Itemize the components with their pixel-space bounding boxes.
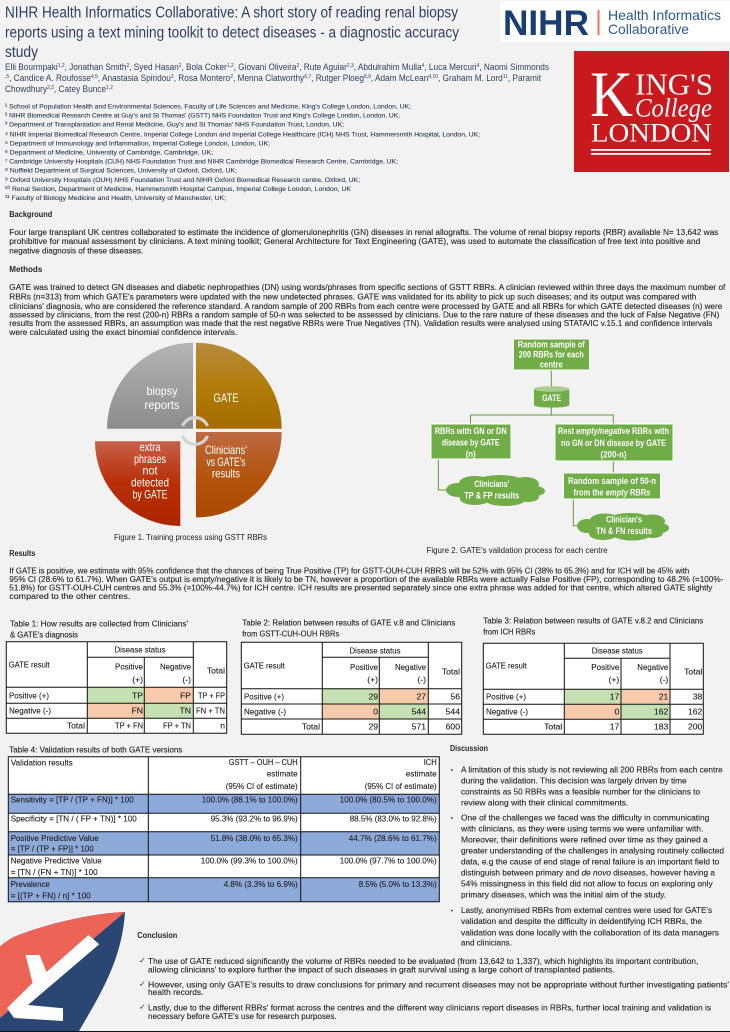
section: background xyxy=(9,209,718,256)
figure 2: validation flowchart: centre xyxy=(540,360,563,370)
authors: 4,10 xyxy=(428,74,438,80)
authors: 11 xyxy=(503,74,508,80)
authors: 2,3 xyxy=(47,85,54,91)
affiliations: ⁶ Department of Medicine, University of Cambridge, Cambridge, UK; xyxy=(5,150,213,156)
figure 1: training cycle pie: biopsy xyxy=(146,384,178,398)
figure 2: validation flowchart: Clinician's xyxy=(606,514,642,524)
table 4: validation results: GSTT – OUH – CUH xyxy=(229,757,298,767)
table 4: validation results: 4.8% (3.3% to 6.9%) xyxy=(224,879,298,889)
table 1: how results are collected: FP xyxy=(180,690,191,700)
table 3: GATE v.8.2 results: (-) xyxy=(660,674,668,684)
table 2: GATE v.8 results: 29 xyxy=(368,721,378,731)
table 3: GATE v.8.2 results: 21 xyxy=(659,691,669,701)
section: discussion: 54% missingness in this field did not allow to focus on exploring only xyxy=(461,879,713,889)
authors: , Rosa Montero xyxy=(174,73,230,83)
table 2: GATE v.8 results: 29 xyxy=(368,691,378,701)
section: methods: RBRs (n=313) from which GATE's parameters were updated with the new undetected phrases. GATE was validated for its ability to pick up such diseases; and its output was compared with xyxy=(9,292,696,302)
figure 1 caption: Figure 1. Training process using GSTT RBRs xyxy=(114,532,267,542)
authors: 8,9 xyxy=(364,74,371,80)
section: conclusion: health records. xyxy=(148,987,203,997)
section: discussion: constraints as 50 RBRs was a feasible number for the clinicians to xyxy=(461,787,700,797)
table 2: GATE v.8 results: 600 xyxy=(446,721,460,731)
affiliations: ⁵ Department of Immunology and Inflammation, Imperial College London, London, UK; xyxy=(5,140,270,148)
figure 2: validation flowchart: (200-n) xyxy=(600,450,627,460)
table 2: GATE v.8 results: Positive xyxy=(350,662,378,672)
logo: King's College London: LONDON xyxy=(591,118,712,148)
table 4: validation results: estimate xyxy=(406,769,437,779)
table 2: GATE v.8 results: Positive (+) xyxy=(244,691,284,701)
authors: 2 xyxy=(179,63,181,69)
authors: , Luca Mercuri xyxy=(424,62,477,72)
logo: NIHR Health Informatics Collaborative: NIHR xyxy=(503,4,589,43)
authors: 2 xyxy=(230,74,233,80)
section: discussion xyxy=(450,743,724,948)
table 3: GATE v.8.2 results: Positive xyxy=(591,662,620,672)
authors: , Jonathan Smith xyxy=(65,62,126,72)
figure 2: validation flowchart xyxy=(431,339,673,540)
table 2: GATE v.8 results: GATE result xyxy=(244,660,285,670)
table 3: GATE v.8.2 results: Negative xyxy=(637,662,668,672)
authors: , Syed Hasan xyxy=(129,62,179,72)
authors: , Rute Aguiar xyxy=(299,62,347,72)
section: conclusion: ✓ xyxy=(139,956,146,965)
figure 2: validation flowchart: TP & FP results xyxy=(464,490,519,500)
section: conclusion: Conclusion xyxy=(137,930,177,940)
figure 2: validation flowchart: from the empty RBRs xyxy=(574,488,651,498)
section: discussion: Moreover, their definitions were refined over time as they gained a xyxy=(461,835,708,845)
table 3: GATE v.8.2 results: 162 xyxy=(688,706,703,716)
section: discussion: One of the challenges we faced was the difficulty in communicating xyxy=(461,813,710,823)
section: results: compared to the other centres. xyxy=(9,591,130,601)
authors xyxy=(5,62,549,94)
section: discussion: validation was done locally with the collaboration of its data managers xyxy=(461,928,719,938)
figure 1: training cycle pie: by GATE xyxy=(132,488,168,502)
affiliations: ² NIHR Biomedical Research Centre at Guy's and St Thomas' (GSTT) NHS Foundation Trust and King's College London, London, UK; xyxy=(5,112,400,120)
table 2: GATE v.8 results: Negative (-) xyxy=(244,706,286,716)
logo: NIHR Health Informatics Collaborative xyxy=(500,1,730,43)
figure 2: validation flowchart: TN & FN results xyxy=(596,526,652,536)
table 1: how results are collected: TP + FP xyxy=(198,690,225,700)
table 4: validation results: = [(TP + FN) / n] * 100 xyxy=(11,890,91,900)
figure 2: validation flowchart: Random sample of 50-n xyxy=(568,476,656,486)
table 2: GATE v.8 results: 544 xyxy=(412,706,426,716)
authors: 4,5 xyxy=(91,74,98,80)
table 4: validation results: Prevalence xyxy=(11,879,50,889)
table 2: GATE v.8 results: (+) xyxy=(367,674,378,684)
table 3: GATE v.8.2 results: Disease status xyxy=(592,645,643,655)
table 4: validation results: Positive Predictive Value xyxy=(11,833,99,843)
table 2: GATE v.8 results: Table 2: Relation between results of GATE v.8 and Clinicians xyxy=(242,618,455,628)
table 3: GATE v.8.2 results: 200 xyxy=(688,721,703,731)
section: conclusion xyxy=(137,930,729,1021)
table 2: GATE v.8 results: 56 xyxy=(450,691,460,701)
table 1: how results are collected: Total xyxy=(67,720,85,730)
authors: 4 xyxy=(422,63,424,69)
table 1: how results are collected: Table 1: How results are collected from Clinicians' xyxy=(10,619,188,629)
table 1: how results are collected: FP + TN xyxy=(163,720,191,730)
table 1: how results are collected: TP xyxy=(132,690,143,700)
table 1: how results are collected: Disease status xyxy=(114,645,166,655)
icon: leaf logo xyxy=(0,912,125,1031)
section: discussion: Lastly, anonymised RBRs from external centres were used for GATE's xyxy=(461,905,712,915)
authors: , Giovani Oliveira xyxy=(234,62,296,72)
authors: , Graham M. Lord xyxy=(438,73,503,83)
title: NIHR Health Informatics Collaborative: A short story of reading renal biopsy xyxy=(5,4,458,22)
section: discussion: distinguish between primary and de novo diseases, however having a xyxy=(461,868,715,878)
section: background: Background xyxy=(9,209,52,219)
table 4: validation results: estimate xyxy=(267,769,298,779)
section: background: negative diagnosis of these diseases. xyxy=(9,246,143,256)
authors: 6,7 xyxy=(304,74,311,80)
authors: , Bola Coker xyxy=(181,62,227,72)
table 4: validation results: 100.0% (97.7% to 100.0%) xyxy=(340,856,437,866)
figure 1: training cycle pie: Clinicians' xyxy=(205,443,247,457)
figure 2: validation flowchart: no GN or DN disease by GATE xyxy=(561,438,666,448)
table 3: GATE v.8.2 results: Total xyxy=(544,721,562,731)
table 1: how results are collected: TN xyxy=(180,705,191,715)
section: methods xyxy=(8,264,726,337)
affiliations: ⁹ Oxford University Hospitals (OUH) NHS Foundation Trust and NIHR Oxford Biomedical Research centre, Oxford, UK; xyxy=(5,177,360,184)
table 1: how results are collected: (+) xyxy=(132,674,143,684)
figure 2 caption: Figure 2. GATE's validation process for each centre xyxy=(426,545,608,555)
section: methods: were calculated using the exact binomial confidence intervals. xyxy=(8,327,237,337)
table 1: how results are collected: n xyxy=(220,720,225,730)
table 1: how results are collected: TP + FN xyxy=(115,720,143,730)
section: discussion: during the validation. This decision was largely driven by time xyxy=(461,776,687,786)
logo: King's College London: K xyxy=(590,59,633,131)
figure 2: validation flowchart: Rest empty/negative RBRs with xyxy=(558,426,669,436)
table 4: validation results: 44.7% (28.6% to 61.7%) xyxy=(349,833,437,843)
section: background: prohibitive for manual assessment by clinicians. A text mining toolkit; General Architecture for Text Engineering (GATE), was used to automate the classification of free text into positive and xyxy=(9,236,701,246)
table 3: GATE v.8.2 results: Negative (-) xyxy=(486,706,528,716)
logo: NIHR Health Informatics Collaborative: Collaborative xyxy=(608,21,689,37)
title: reports using a text mining toolkit to detect diseases - a diagnostic accuracy xyxy=(5,24,459,42)
figure 1: training cycle pie: phrases xyxy=(134,452,166,466)
section: methods: results from the assessed RBRs, an assumption was made that the rest negative RBRs were True Negatives (TN). Validation results were analysed using STATA/IC v.15.1 and confidence intervals xyxy=(9,318,712,328)
table 4: validation results: 100.0% (80.5% to 100.0%) xyxy=(340,794,437,804)
affiliations: ¹ School of Population Health and Environmental Sciences, Faculty of Life Sciences and Medicine, King's College London, London, UK; xyxy=(5,104,411,110)
table 1: how results are collected: Negative (-) xyxy=(9,705,51,715)
affiliations: ³ Department of Transplantation and Renal Medicine, Guy's and St Thomas' NHS Foundation Trust, London, UK; xyxy=(5,122,344,128)
section: background: Four large transplant UK centres collaborated to estimate the incidence of glomerulonephritis (GN) diseases in renal allografts. The volume of renal biopsy reports (RBR) available N= 13,642 was xyxy=(9,227,718,237)
authors: ,5 xyxy=(5,74,9,80)
section: methods: Methods xyxy=(9,264,43,274)
authors: 1,2 xyxy=(227,63,234,69)
table 1: how results are collected xyxy=(6,619,227,733)
table 2: GATE v.8 results: (-) xyxy=(417,674,426,684)
table 4: validation results: (95% CI of estimate) xyxy=(226,781,298,791)
table 3: GATE v.8.2 results: Positive (+) xyxy=(486,691,526,701)
table 4: validation results: (95% CI of estimate) xyxy=(365,781,437,791)
affiliations: ⁴ NIHR Imperial Biomedical Research Centre, Imperial College London and Imperial College Healthcare (ICH) NHS Trust, Hammersmith Hospital, London, UK; xyxy=(5,132,480,138)
figure 2: validation flowchart: disease by GATE xyxy=(442,438,500,448)
table 1: how results are collected: GATE result xyxy=(9,659,50,669)
section: results xyxy=(9,548,723,601)
table 2: GATE v.8 results: 544 xyxy=(446,706,460,716)
table 4: validation results: 95.3% (93.2% to 96.9%) xyxy=(211,814,298,824)
table 1: how results are collected: Total xyxy=(207,665,225,675)
authors: 2,3 xyxy=(347,63,354,69)
authors: 4 xyxy=(477,63,479,69)
authors: , Candice A. Roufosse xyxy=(9,73,91,83)
table 3: GATE v.8.2 results: Table 3: Relation between results of GATE v.8.2 and Clinicians xyxy=(483,615,703,625)
section: discussion: A limitation of this study is not reviewing all 200 RBRs from each centre xyxy=(461,765,723,775)
title xyxy=(5,4,459,61)
table 4: validation results: Negative Predictive Value xyxy=(11,856,102,866)
authors: , Abdulrahim Mulla xyxy=(354,62,422,72)
authors: 2 xyxy=(296,63,299,69)
table 3: GATE v.8.2 results: 17 xyxy=(610,691,620,701)
table 2: GATE v.8 results: from GSTT-CUH-OUH RBRs xyxy=(242,629,339,639)
figure 1: training cycle pie xyxy=(95,343,282,526)
figure 2: validation flowchart: GATE xyxy=(542,393,561,403)
logo: NIHR Health Informatics Collaborative: Health Informatics xyxy=(608,7,721,23)
figure 1: training cycle pie: vs GATE's xyxy=(206,455,246,469)
section: results: Results xyxy=(9,548,35,558)
table 1: how results are collected: FN xyxy=(132,705,143,715)
table 3: GATE v.8.2 results: from ICH RBRs xyxy=(483,626,535,636)
table 1: how results are collected: (-) xyxy=(182,674,191,684)
section: discussion: primary diseases, which was the initial aim of the study. xyxy=(461,890,666,900)
affiliations xyxy=(5,104,480,202)
table 2: GATE v.8 results xyxy=(241,618,462,734)
table 2: GATE v.8 results: 0 xyxy=(373,706,378,716)
authors: , Adam McLean xyxy=(371,73,428,83)
authors: 2 xyxy=(171,74,174,80)
title: study xyxy=(5,44,38,61)
authors: , Paramit xyxy=(508,73,541,83)
authors: , Anastasia Spiridou xyxy=(98,73,171,83)
authors: Chowdhury xyxy=(5,84,51,94)
table 4: validation results: 8.5% (5.0% to 13.3%) xyxy=(359,879,437,889)
authors: , Naomi Simmonds xyxy=(479,62,549,72)
table 1: how results are collected: Negative xyxy=(160,661,191,671)
table 3: GATE v.8.2 results: 17 xyxy=(610,721,620,731)
table 1: how results are collected: FN + TN xyxy=(196,705,225,715)
authors: , Menna Clatworthy xyxy=(233,73,305,83)
section: discussion: Discussion xyxy=(450,743,488,753)
table 4: validation results: Validation results xyxy=(11,758,73,768)
table 4: validation results: = [TN / (FN + TN)] * 100 xyxy=(11,867,98,877)
section: results: 51.8%) for GSTT-OUH-CUH centres and 55.3% (=100%-44.7%) for ICH centre. ICH results are presented separately since one extra phrase was added for that centre, which altered GATE slightly xyxy=(9,582,713,592)
table 4: validation results: Sensitivity = [TP / (TP + FN)] * 100 xyxy=(11,794,134,804)
logo: King's College London: ING'S xyxy=(635,66,713,102)
table 4: validation results: 51.8% (38.0% to 65.3%) xyxy=(211,833,298,843)
figure 2: validation flowchart: (n) xyxy=(466,449,476,459)
table 1: how results are collected: & GATE's diagnosis xyxy=(10,630,78,640)
table 4: validation results: Specificity = [TN / ( FP + TN)] * 100 xyxy=(11,814,137,824)
section: conclusion: necessary before GATE's use for research purposes. xyxy=(148,1011,337,1021)
figure 1: training cycle pie: detected xyxy=(131,476,169,490)
table 4: validation results xyxy=(8,745,439,902)
section: conclusion: ✓ xyxy=(139,980,146,988)
authors: Elli Bourmpaki xyxy=(5,62,63,72)
table 1: how results are collected: Positive xyxy=(115,661,143,671)
table 2: GATE v.8 results: Negative xyxy=(395,662,426,672)
table 4: validation results: 100.0% (99.3% to 100.0%) xyxy=(201,856,298,866)
affiliations: ¹⁰ Renal Section, Department of Medicine, Hammersmith Hospital Campus, Imperial College London, London, UK xyxy=(5,185,351,193)
section: discussion: greater understanding of the challenges in analysing routinely collected xyxy=(461,846,724,856)
section: discussion: validation and despite the difficulty in deidentifying ICH RBRs, the xyxy=(461,916,702,926)
table 4: validation results: ICH xyxy=(424,757,437,767)
logo: King's College London: College xyxy=(635,94,712,122)
table 2: GATE v.8 results: Total xyxy=(302,721,320,731)
table 3: GATE v.8.2 results xyxy=(483,615,703,734)
figure 1: training cycle pie: reports xyxy=(144,398,180,412)
logo: King's College London xyxy=(574,51,729,172)
authors: , Catey Bunce xyxy=(54,84,106,94)
table 4: validation results: Table 4: Validation results of both GATE versions xyxy=(9,745,182,755)
table 3: GATE v.8.2 results: GATE result xyxy=(486,660,527,670)
table 2: GATE v.8 results: 27 xyxy=(416,691,426,701)
table 1: how results are collected: Positive (+) xyxy=(9,690,49,700)
authors: , Rutger Ploeg xyxy=(311,73,364,83)
section: conclusion: The use of GATE reduced significantly the volume of RBRs needed to be evaluated (from 13,642 to 1,337), which highlights its important contribution, xyxy=(148,956,698,966)
section: discussion: data, e.g the cause of end stage of renal failure is an important field to xyxy=(461,857,720,867)
authors: 2 xyxy=(126,63,129,69)
table 3: GATE v.8.2 results: Total xyxy=(684,666,702,676)
figure 2: validation flowchart: RBRs with GN or DN xyxy=(435,426,507,436)
figure 1: training cycle pie: extra xyxy=(140,440,161,454)
section: discussion: review along with their clinical commitments. xyxy=(461,798,628,808)
table 4: validation results: 88.5% (83.0% to 92.8%) xyxy=(350,814,437,824)
section: discussion: and clinicians. xyxy=(461,938,512,948)
section: conclusion: ✓ xyxy=(139,1002,146,1012)
affiliations: ⁷ Cambridge University Hospitals (CUH) NHS Foundation Trust and NIHR Cambridge Biomedical Research Centre, Cambridge, UK; xyxy=(5,158,398,166)
table 3: GATE v.8.2 results: 183 xyxy=(654,721,669,731)
table 3: GATE v.8.2 results: (+) xyxy=(609,674,619,684)
table 3: GATE v.8.2 results: 162 xyxy=(654,706,669,716)
table 2: GATE v.8 results: Total xyxy=(442,666,460,676)
table 3: GATE v.8.2 results: 38 xyxy=(693,691,703,701)
table 2: GATE v.8 results: 571 xyxy=(412,721,426,731)
figure 1: training cycle pie: results xyxy=(212,466,240,480)
figure 2: validation flowchart: 200 RBRs for each xyxy=(519,350,584,360)
authors: 1,2 xyxy=(106,85,113,91)
section: conclusion: Lastly, due to the different RBRs' format across the centres and the different way clinicians report diseases in RBRs, further local training and validation is xyxy=(148,1002,711,1012)
table 4: validation results: 100.0% (88.1% to 100.0%) xyxy=(202,794,298,804)
table 2: GATE v.8 results: Disease status xyxy=(350,645,400,655)
affiliations: ⁸ Nuffield Department of Surgical Sciences, University of Oxford, Oxford, UK; xyxy=(5,168,237,174)
figure 2: validation flowchart: Random sample of xyxy=(518,340,585,350)
figure 1: training cycle pie: GATE xyxy=(214,391,238,405)
table 3: GATE v.8.2 results: 0 xyxy=(615,706,620,716)
figure 1: training cycle pie: not xyxy=(142,464,158,478)
section: discussion: with clinicians, as they were using terms we were unfamiliar with. xyxy=(460,824,703,834)
figure 2: validation flowchart: Clinicians' xyxy=(474,479,509,489)
bottom border xyxy=(0,1031,730,1032)
authors: 1,2 xyxy=(58,63,65,69)
section: conclusion: However, using only GATE's results to draw conclusions for primary and recurrent diseases may not be appropriate without further investigating patients' xyxy=(148,980,729,990)
table 4: validation results: = [TP / (TP + FP)] * 100 xyxy=(11,844,94,854)
section: conclusion: allowing clinicians' to explore further the impact of such diseases in graft survival using a large cohort of transplanted patients. xyxy=(148,964,614,974)
affiliations: ¹¹ Faculty of Biology Medicine and Health, University of Manchester, UK; xyxy=(5,195,226,202)
